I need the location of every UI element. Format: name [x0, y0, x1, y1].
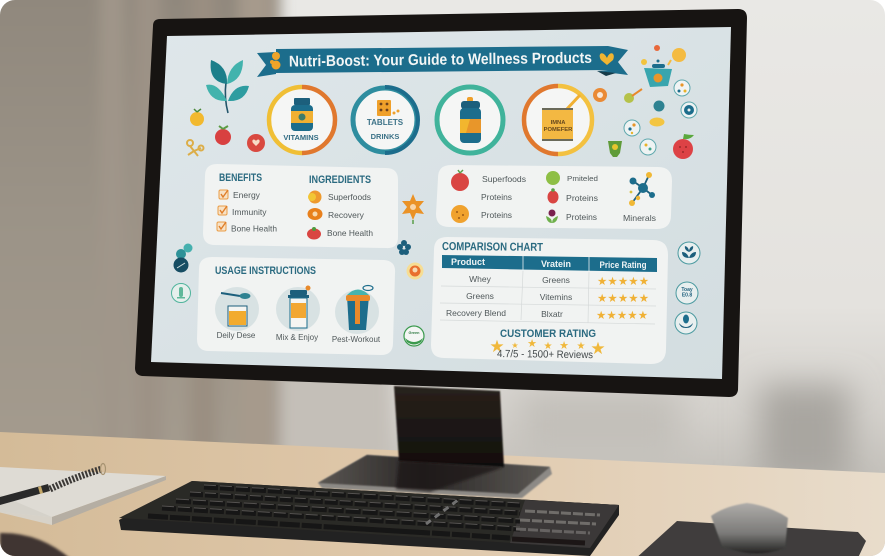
table header: Product [451, 257, 485, 267]
icon: orange heart ring [593, 88, 607, 102]
table row: whey: ★★★★★ [597, 276, 649, 288]
tablets card [377, 100, 400, 116]
nutrient: red proteins [548, 188, 598, 204]
icon: cooking pot [644, 60, 672, 87]
ingredient: bone health: Bone Health [327, 228, 373, 238]
step: post-workout [332, 286, 381, 344]
table row: whey: Greens [542, 275, 570, 285]
icon: capsule badge [624, 120, 640, 136]
table row: recovery blend [446, 308, 648, 322]
benefit: energy: Energy [233, 190, 261, 200]
monitor bezel [135, 9, 747, 397]
nutrient: greens [546, 171, 598, 185]
nutrient: red proteins: Proteins [566, 193, 598, 203]
key rows [148, 487, 600, 543]
step: daily dose: Deily Dese [217, 331, 256, 340]
cluster of small icons top right [593, 45, 697, 159]
table row: greens: Greens [466, 291, 494, 301]
rating stars: ★ [527, 338, 537, 350]
pen [0, 484, 50, 505]
nutrient: apple superfoods [451, 170, 526, 191]
table row: whey: Whey [469, 274, 492, 284]
step: mix and enjoy: Mix & Enjoy [276, 333, 318, 342]
icon: dots and blob [641, 45, 686, 65]
notebook spiral [50, 469, 102, 489]
icon: seed badge [640, 139, 656, 155]
icon: text seal: Toay [681, 287, 693, 293]
product circle: powder: POMEFER [544, 127, 573, 133]
heading: usage instructions: USAGE INSTRUCTIONS [215, 265, 316, 277]
icon: yellow oval [650, 118, 664, 126]
table row: recovery blend: ★★★★★ [596, 310, 648, 322]
table row: greens [466, 291, 649, 305]
panel: nutrients [436, 165, 672, 229]
icon: yellow apple [190, 109, 204, 126]
nutrient: minerals label: Minerals [623, 213, 656, 223]
nutrient: greens: Pmiteled [567, 174, 598, 183]
powder tub [542, 108, 573, 141]
rating stars: ★ [577, 341, 586, 352]
icon: minerals molecule [629, 172, 655, 206]
notebook and pen [0, 464, 166, 525]
table row: greens: Vitemins [540, 292, 572, 302]
benefit: immunity [218, 206, 267, 217]
icon: plus badge [681, 102, 697, 118]
panel: comparison chart [431, 237, 668, 364]
icon: orange apple [406, 262, 424, 280]
screen background [151, 27, 731, 379]
icon: plant with leaves [206, 60, 249, 113]
icon: text seal [676, 282, 698, 304]
spoon [566, 95, 580, 110]
icon: red apple [673, 134, 694, 159]
icon: strawberry [215, 126, 231, 145]
rating stars: ★ [590, 339, 606, 358]
tablets label: TABLETS [367, 118, 404, 127]
product circle: tablets and drinks [352, 87, 418, 153]
title: Nutri-Boost: Your Guide to Wellness Products [289, 50, 592, 70]
icon: capsule dumbbell [174, 244, 192, 272]
table row: greens: ★★★★★ [597, 293, 649, 305]
ingredient: recovery [308, 208, 365, 220]
icon: dark blue flower [397, 240, 411, 255]
ingredient: superfoods [308, 190, 371, 204]
mouse pad and mouse [634, 503, 866, 556]
benefit: bone health [217, 222, 277, 234]
table row: recovery blend: Blxatr [541, 309, 563, 319]
ingredient: superfoods: Superfoods [328, 192, 371, 202]
powder label: IMNA [551, 120, 566, 126]
table header: Vratein [541, 259, 571, 269]
icon: organic seal [404, 326, 424, 346]
rating summary: 4.7/5 - 1500+ Reviews [497, 348, 593, 361]
nutrient: grape proteins: Proteins [566, 212, 597, 222]
nutrient: orange proteins [451, 205, 512, 223]
nutrient: grape proteins [546, 210, 597, 223]
icon: yellow green plant [608, 141, 622, 157]
chair back shadow [0, 533, 72, 556]
banner heart icon [600, 53, 614, 65]
table header [442, 255, 657, 272]
ingredient: recovery: Recovery [328, 210, 365, 220]
icon: heart badge [247, 134, 265, 152]
benefit: immunity: Immunity [232, 207, 267, 217]
rating stars: ★ [559, 340, 569, 352]
drinks label: DRINKS [371, 132, 399, 141]
product circle: bottle [437, 87, 503, 153]
desk [0, 432, 885, 556]
title banner [257, 46, 628, 77]
product circle: vitamins [269, 87, 335, 153]
mouse [711, 503, 788, 554]
benefit: bone health: Bone Health [231, 224, 277, 234]
monitor stand [318, 386, 552, 498]
nutrient: proteins: Proteins [481, 192, 512, 202]
table row: whey [469, 274, 649, 288]
mouse pad [634, 521, 866, 556]
table header: Price Rating [600, 260, 646, 270]
heading: benefits: BENEFITS [219, 172, 262, 184]
product circle: powder [524, 86, 592, 154]
icon: green leaf badge [172, 284, 190, 302]
icon: plant seal [675, 312, 697, 334]
screen infographic [151, 27, 731, 379]
step: post-workout: Pest-Workout [332, 335, 381, 344]
rating stars: ★ [511, 341, 519, 350]
icon: teal dot [654, 100, 664, 112]
benefit: energy [219, 190, 261, 200]
vitamin bottle [291, 98, 313, 131]
icon: orange star flower [402, 194, 424, 224]
icon: spoon bowl [624, 89, 642, 103]
nutrient: orange proteins: Proteins [481, 210, 512, 220]
stand base [318, 455, 552, 498]
icon: leaf seal [678, 242, 700, 264]
vitamins label: VITAMINS [283, 133, 319, 142]
icon: molecule gold [187, 140, 204, 156]
step: mix and enjoy [276, 286, 320, 342]
sports bottle [460, 97, 481, 143]
stand neck [394, 386, 504, 467]
icon: organic seal: Green [409, 331, 420, 335]
nutrient: apple superfoods: Superfoods [482, 174, 526, 184]
step: daily dose [215, 287, 259, 340]
heading: customer rating: CUSTOMER RATING [500, 328, 596, 340]
keyboard [119, 481, 619, 556]
rating stars [489, 337, 606, 358]
panel: usage instructions [197, 257, 395, 355]
panel: benefits and ingredients [203, 164, 398, 248]
rating stars: ★ [544, 341, 553, 352]
heading: ingredients: INGREDIENTS [309, 174, 371, 186]
icon: molecule badge [674, 80, 690, 96]
banner flower icon [270, 52, 280, 70]
ingredient: bone health [307, 227, 373, 240]
heading: comparison chart: COMPARISON CHART [442, 241, 543, 254]
rating stars: ★ [489, 337, 505, 356]
table row: recovery blend: Recovery Blend [446, 308, 506, 318]
icon: text seal: E0.8 [682, 292, 692, 298]
